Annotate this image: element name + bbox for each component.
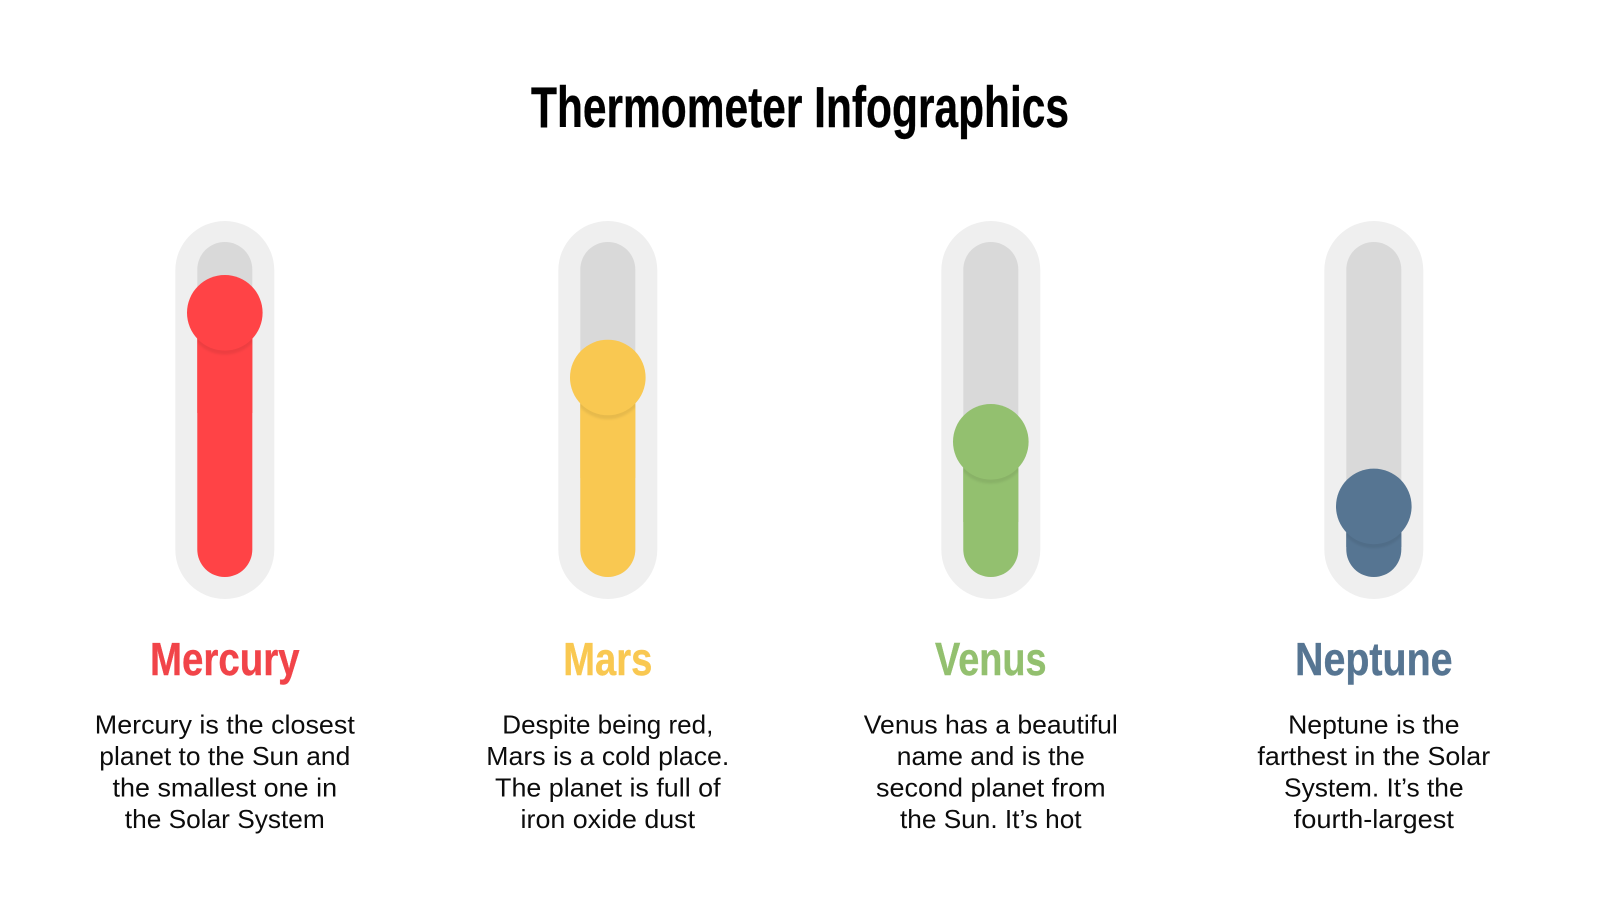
text: Neptune description xyxy=(1257,712,1491,834)
text: Neptune description: fourth-largest xyxy=(1294,806,1454,834)
text: Mercury description: planet to the Sun and xyxy=(99,743,350,771)
text: Venus description: Venus has a beautiful xyxy=(864,712,1118,740)
text: Neptune description: Neptune is the xyxy=(1288,712,1460,740)
text: Venus description: the Sun. It’s hot xyxy=(900,806,1082,834)
heading: Mercury: Mercury xyxy=(150,633,300,685)
text: Venus description xyxy=(864,712,1118,834)
text: Neptune description: System. It’s the xyxy=(1284,774,1464,802)
panel: Venus xyxy=(864,221,1118,834)
thermometer: Mars xyxy=(558,221,657,599)
panel: Neptune xyxy=(1257,221,1491,834)
title: Thermometer Infographics xyxy=(531,76,1069,140)
text: Mercury description: Mercury is the closest xyxy=(95,712,355,740)
text: Neptune description: farthest in the Solar xyxy=(1257,743,1491,771)
heading: Neptune: Neptune xyxy=(1295,633,1453,685)
text: Mars description: Despite being red, xyxy=(502,712,713,740)
text: Mars description: The planet is full of xyxy=(495,774,721,802)
text: Venus description: second planet from xyxy=(876,774,1106,802)
text: Mercury description: the smallest one in xyxy=(113,774,337,802)
text: Mars description xyxy=(486,712,729,834)
thermometer: Venus xyxy=(941,221,1040,599)
thermometer: Mercury xyxy=(175,221,274,599)
text: Mercury description: the Solar System xyxy=(125,806,325,834)
heading: Venus: Venus xyxy=(935,633,1047,685)
thermometer: Neptune xyxy=(1324,221,1423,599)
panel: Mars xyxy=(486,221,729,834)
heading: Mars: Mars xyxy=(563,633,652,685)
text: Mercury description xyxy=(95,712,355,834)
panel: Mercury xyxy=(95,221,355,834)
text: Mars description: iron oxide dust xyxy=(521,806,695,834)
text: Mars description: Mars is a cold place. xyxy=(486,743,729,771)
text: Venus description: name and is the xyxy=(897,743,1085,771)
